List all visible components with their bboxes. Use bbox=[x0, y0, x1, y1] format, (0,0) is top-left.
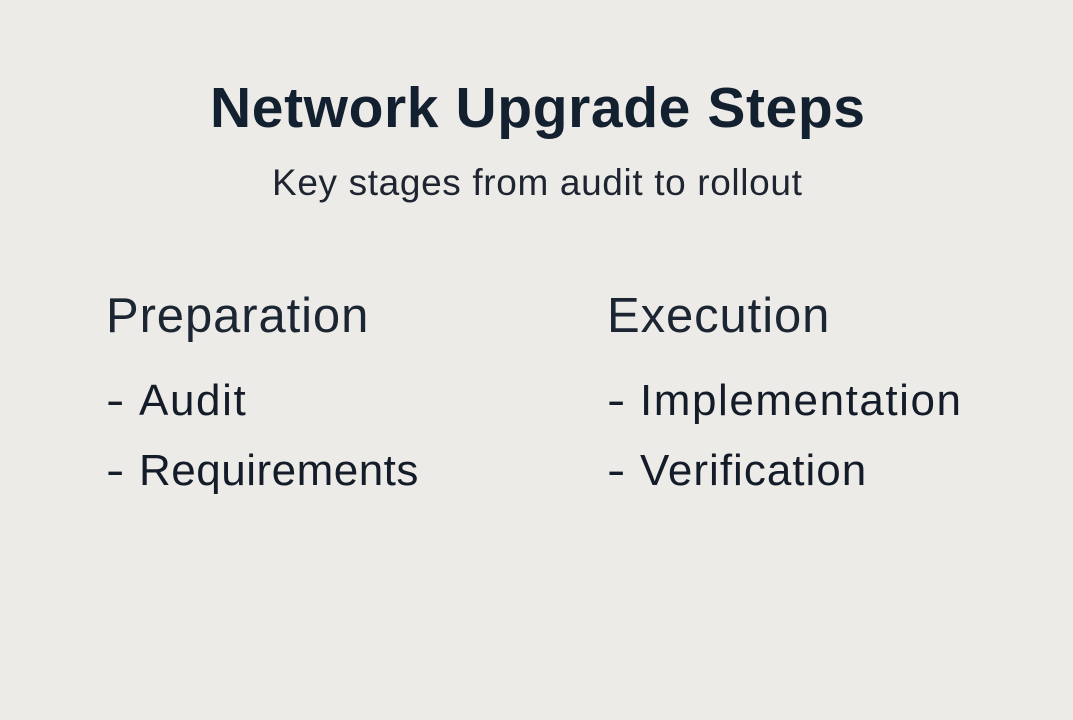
list item: requirements: Requirements bbox=[139, 446, 419, 495]
list item: implementation: Implementation bbox=[640, 376, 963, 425]
list item: verification: Verification bbox=[640, 446, 867, 495]
panel: preparation bbox=[106, 289, 419, 495]
heading: execution: Execution bbox=[607, 289, 830, 343]
subtitle: Key stages from audit to rollout bbox=[272, 162, 803, 203]
panel: execution bbox=[607, 289, 963, 495]
heading: preparation: Preparation bbox=[106, 289, 369, 343]
list item: audit: Audit bbox=[139, 376, 247, 425]
title: Network Upgrade Steps bbox=[210, 76, 866, 140]
list item: implementation: - bbox=[607, 376, 625, 425]
list item: audit: - bbox=[106, 376, 124, 425]
list item: requirements: - bbox=[106, 446, 124, 495]
list item: verification: - bbox=[607, 446, 625, 495]
